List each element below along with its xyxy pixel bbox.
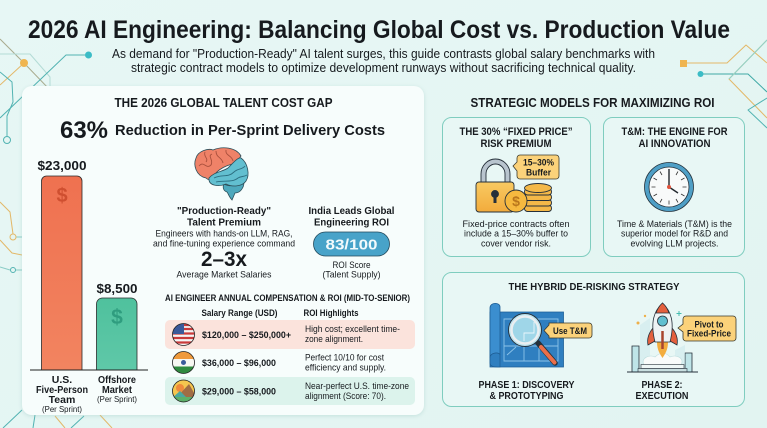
decorative node: left open teal [4, 136, 10, 144]
label: phase 2: EXECUTION [636, 390, 688, 402]
callout: buffer [513, 155, 559, 179]
bar label: U.S.: (Per Sprint) [42, 405, 82, 414]
icon: blueprint and magnifier [490, 303, 564, 367]
callout: pivot to fixed-price: Fixed-Price [687, 328, 731, 338]
text: talent premium: Engineers with hands-on LLM, RAG, [156, 228, 292, 240]
card text: evolving LLM projects. [630, 238, 718, 250]
label: phase 1 [478, 379, 574, 402]
panel: hybrid strategy [442, 272, 744, 406]
label: phase 2 [636, 379, 688, 402]
row: United States: $120,000 – $250,000+ [202, 330, 291, 341]
row: India: Perfect 10/10 for cost [305, 352, 384, 364]
card heading: THE 30% “FIXED PRICE” [460, 126, 572, 138]
text: talent premium [153, 205, 295, 280]
row: Latin America: $29,000 – $58,000 [202, 386, 276, 398]
headline stat [60, 117, 385, 144]
callout: pivot to fixed-price: Pivot to [694, 320, 724, 330]
panel: global talent cost gap [22, 86, 424, 415]
card text: Time & Materials (T&M) is the [617, 219, 732, 230]
panel: time and materials [604, 118, 744, 256]
bar label: U.S.: Five-Person [36, 384, 88, 396]
row: Latin America [165, 377, 415, 405]
card text [462, 219, 570, 250]
label: phase 2: PHASE 2: [642, 379, 682, 391]
callout: buffer: Buffer [526, 168, 551, 178]
text: India ROI [308, 205, 395, 280]
panel: fixed price [442, 118, 590, 256]
decorative node: right amber [680, 60, 687, 67]
bar: offshore [96, 281, 138, 370]
card text: cover vendor risk. [481, 238, 551, 250]
icon: clock [644, 162, 694, 212]
callout: pivot to fixed-price [678, 316, 736, 341]
bar: U.S. team: $ [56, 185, 68, 207]
card text [617, 219, 732, 250]
icon: padlock and coins: $ [512, 193, 520, 209]
bar: U.S. team: $23,000 [38, 158, 86, 173]
icon: brain [195, 148, 248, 200]
card text: include a 15–30% buffer to [464, 228, 568, 240]
card heading: T&M: THE ENGINE FOR [622, 126, 728, 138]
bar label: offshore: Market [102, 384, 132, 396]
bar: U.S. team [38, 158, 86, 370]
row: India: $36,000 – $96,000 [202, 358, 276, 369]
label: phase 1: & PROTOTYPING [490, 390, 564, 402]
text: India ROI: ROI Score [332, 260, 370, 270]
heading: strategic models: STRATEGIC MODELS FOR MAXIMIZING ROI [470, 95, 714, 110]
row: United States: zone alignment. [305, 334, 363, 345]
table: compensation and ROI: ROI Highlights [304, 308, 358, 319]
card heading: RISK PREMIUM [480, 138, 552, 150]
text: talent premium: 2–3x [201, 248, 247, 271]
headline stat: 63% [60, 117, 108, 144]
row: United States [165, 320, 415, 349]
label: phase 1: PHASE 1: DISCOVERY [478, 379, 574, 391]
bar label: offshore [97, 374, 137, 404]
panel heading: THE HYBRID DE-RISKING STRATEGY [508, 281, 680, 293]
panel heading: THE 2026 GLOBAL TALENT COST GAP [114, 96, 332, 110]
bar label: offshore: Offshore [98, 374, 136, 386]
text: India ROI: (Talent Supply) [322, 270, 381, 280]
table: compensation and ROI [165, 293, 415, 405]
subtitle: strategic contract models to optimize development runways without sacrificing technical quality. [131, 61, 636, 75]
icon: landscape [172, 380, 197, 403]
icon: India flag [172, 351, 195, 374]
callout: use T&M [544, 323, 592, 338]
row: Latin America: alignment (Score: 70). [305, 391, 386, 402]
ROI score pill: 83/100 [326, 236, 378, 254]
card heading [460, 126, 572, 150]
callout: buffer: 15–30% [523, 158, 554, 168]
decorative node: left open amber [10, 234, 16, 240]
row: United States: High cost; excellent time- [305, 324, 400, 335]
decorative node: left teal [85, 52, 92, 58]
callout: use T&M: Use T&M [553, 326, 587, 336]
text: talent premium: Average Market Salaries [176, 270, 272, 280]
text: talent premium: "Production-Ready" [177, 205, 271, 217]
table: compensation and ROI: Salary Range (USD) [202, 308, 278, 319]
decorative node: right teal [698, 71, 704, 77]
text: talent premium: and fine-tuning experience command [153, 238, 295, 250]
table: compensation and ROI: AI ENGINEER ANNUAL COMPENSATION & ROI (MID-TO-SENIOR) [165, 293, 410, 304]
card text: superior model for R&D and [621, 228, 728, 240]
bar chart [30, 158, 148, 414]
icon: US flag [172, 323, 195, 346]
icon: padlock and coins [476, 159, 552, 212]
headline stat: Reduction in Per-Sprint Delivery Costs [115, 122, 385, 139]
decorative node: left amber [20, 59, 28, 67]
bar: offshore: $ [111, 306, 123, 329]
card heading: AI INNOVATION [638, 138, 711, 150]
row: Latin America: Near-perfect U.S. time-zone [305, 381, 409, 392]
subtitle [112, 47, 655, 75]
decorative node: left lower teal [10, 268, 16, 272]
text: talent premium: Talent Premium [187, 216, 261, 228]
bar label: offshore: (Per Sprint) [97, 395, 137, 404]
row: India [172, 351, 386, 374]
subtitle: As demand for "Production-Ready" AI talent surges, this guide contrasts global salary benchmarks with [112, 47, 655, 61]
text: India ROI: India Leads Global [308, 205, 395, 217]
card text: Fixed-price contracts often [462, 219, 570, 230]
card heading [622, 126, 728, 150]
bar label: U.S.: U.S. [52, 374, 72, 386]
row: India: efficiency and supply. [305, 362, 386, 374]
bar label: U.S.: Team [49, 394, 75, 406]
bar label: U.S. [36, 374, 88, 414]
icon: rocket launch [627, 303, 698, 372]
text: India ROI: Engineering ROI [314, 216, 389, 228]
bar: offshore: $8,500 [96, 281, 138, 296]
